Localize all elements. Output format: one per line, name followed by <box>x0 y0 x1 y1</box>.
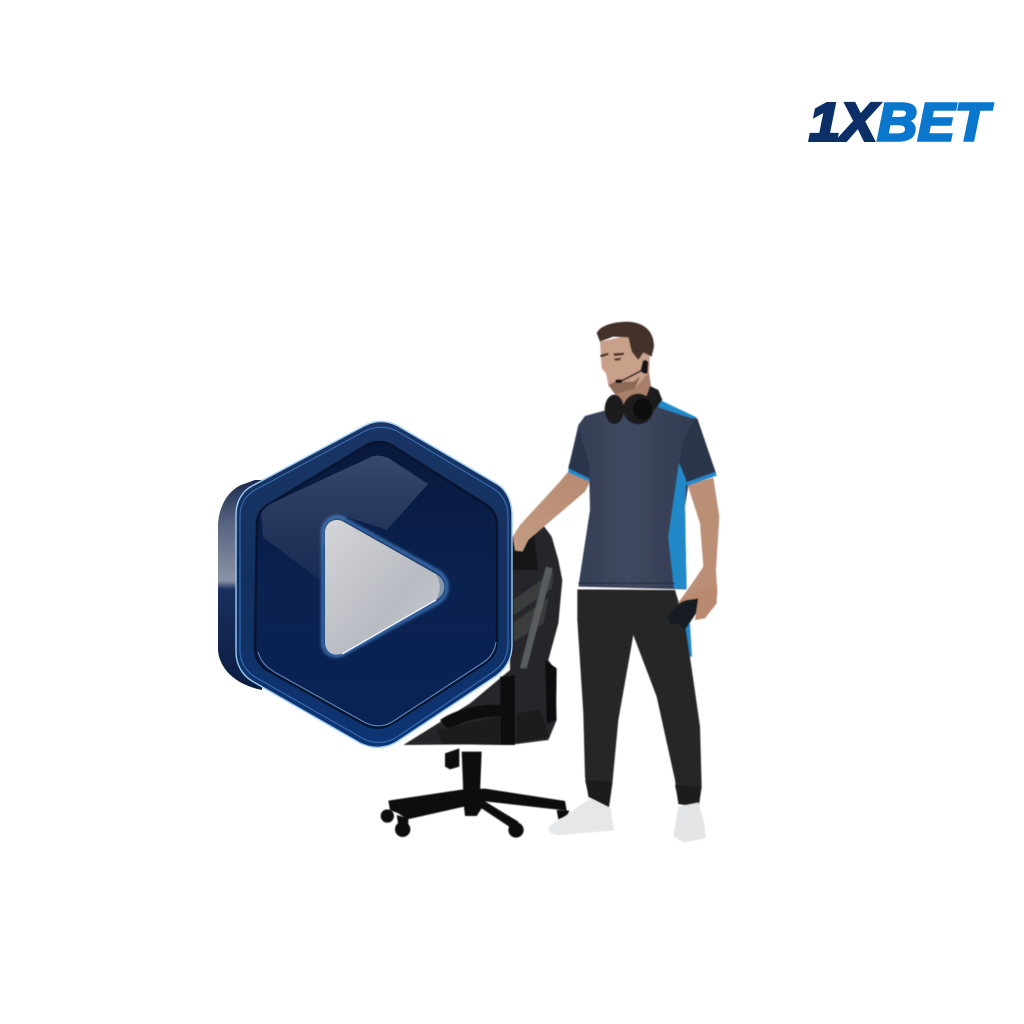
logo: 1XBET <box>809 92 993 152</box>
armrest <box>440 660 557 745</box>
chair strap <box>520 567 553 668</box>
hexagon side extrusion <box>218 480 262 690</box>
chair back panels <box>513 572 553 642</box>
hexagon inner rim glow <box>240 427 508 742</box>
lower body <box>548 585 717 842</box>
gripping hand <box>677 585 717 620</box>
side stripe <box>685 623 692 657</box>
chair back <box>403 525 562 745</box>
game controller <box>667 597 698 630</box>
hexagon outer face <box>236 422 512 747</box>
hexagon bright rim <box>236 422 512 747</box>
chair seat <box>437 710 550 745</box>
chair base <box>381 748 569 838</box>
shirt hem <box>578 583 675 584</box>
panel glare <box>261 456 428 580</box>
headrest <box>512 530 538 570</box>
left shoe <box>548 798 614 835</box>
play triangle <box>325 520 444 655</box>
triangle lower edge highlight <box>342 600 436 654</box>
play triangle edge <box>323 517 447 656</box>
logo text: 1X: 1X <box>809 92 880 152</box>
shirt blue panels <box>568 400 717 589</box>
shirt dark sleeve <box>679 418 716 484</box>
hair <box>597 322 654 360</box>
man with headset and controller <box>513 322 719 842</box>
triangle bevel <box>436 574 444 600</box>
play button hexagon badge <box>218 422 512 747</box>
upper body <box>513 322 719 607</box>
gaming chair <box>381 525 569 838</box>
right arm <box>677 478 719 607</box>
right shoe <box>673 803 706 842</box>
beard shadow <box>608 377 640 394</box>
neck headphones <box>605 386 662 424</box>
neck <box>615 368 652 410</box>
left arm <box>513 472 590 552</box>
shirt body <box>568 400 716 589</box>
face <box>600 335 650 394</box>
trousers <box>577 589 702 807</box>
logo text: BET: BET <box>877 92 993 152</box>
recess lower highlight <box>258 642 496 726</box>
trouser cuffs <box>585 780 702 807</box>
hexagon recessed panel <box>255 442 497 728</box>
earbud and mic <box>641 360 648 374</box>
eyes and brow <box>600 353 624 361</box>
